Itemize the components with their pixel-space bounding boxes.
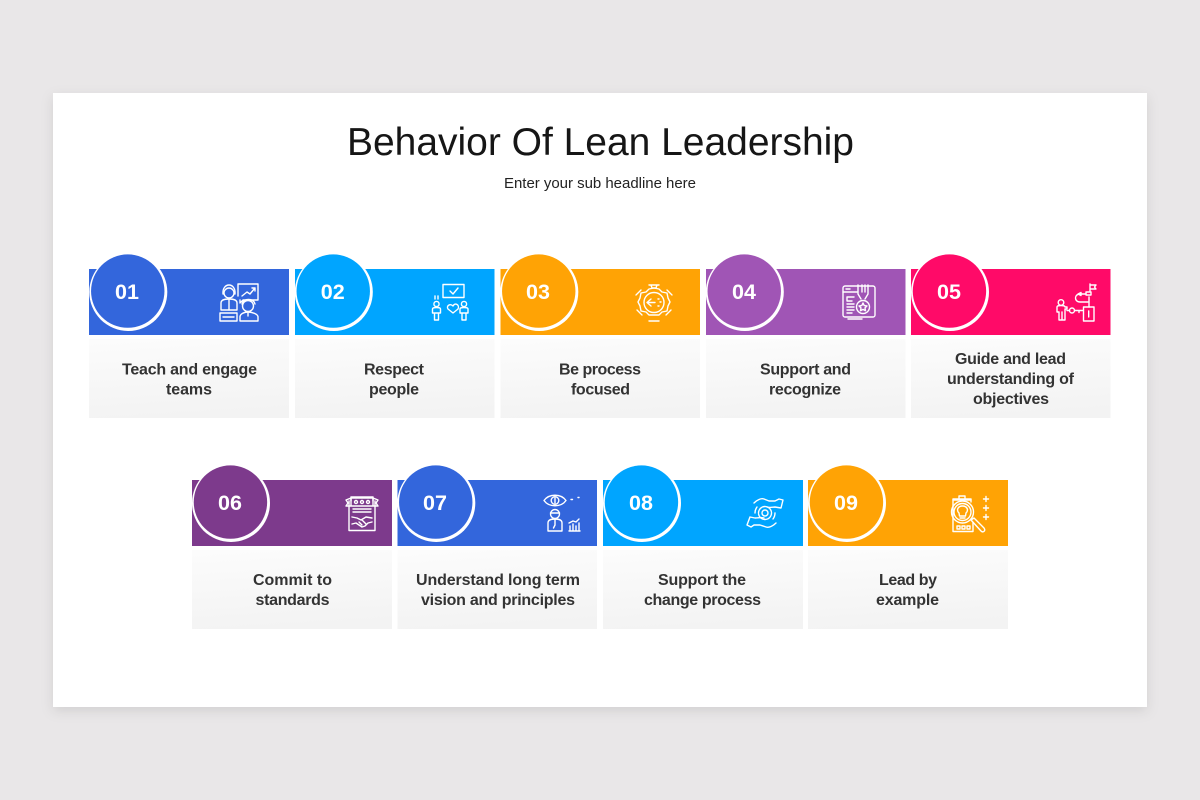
label line 2: change process [644, 592, 761, 609]
number circle [605, 465, 678, 539]
header bar [500, 269, 700, 335]
number circle [297, 254, 370, 328]
circle ring [911, 253, 989, 331]
card 08: support the change process [603, 464, 803, 629]
header bar [295, 269, 494, 335]
circle ring [295, 253, 373, 331]
icon: lightbulb under magnifier with pluses [952, 496, 988, 532]
number circle [194, 465, 267, 539]
number: 02 [321, 280, 345, 304]
label: Guide and lead [955, 351, 1066, 368]
label line 2: people [369, 382, 419, 398]
icon: teacher and student with chart [220, 284, 258, 321]
card 06: commit to standards [192, 464, 392, 629]
circle ring [808, 464, 886, 542]
header bar [808, 480, 1008, 546]
circle ring [397, 464, 475, 542]
number: 06 [218, 491, 242, 515]
circle ring [89, 253, 167, 331]
text panel [911, 339, 1110, 418]
text panel [500, 339, 700, 418]
label: Support and [760, 362, 851, 378]
label: Understand long term [416, 572, 580, 589]
label line 3: objectives [973, 391, 1049, 408]
number: 07 [423, 491, 447, 515]
subtitle: Enter your sub headline here [504, 175, 696, 192]
label: Commit to [253, 572, 332, 589]
number: 01 [115, 280, 139, 304]
icon: contract with handshake [346, 497, 378, 530]
label: Respect [364, 362, 425, 378]
label line 2: understanding of [947, 371, 1075, 388]
header bar [398, 480, 597, 546]
text panel [706, 339, 906, 418]
label line 2: vision and principles [421, 592, 575, 609]
icon: hands around gear [747, 499, 783, 527]
circle ring [603, 464, 681, 542]
label line 2: example [876, 592, 939, 609]
header bar [192, 480, 392, 546]
header bar [603, 480, 803, 546]
number circle [913, 254, 986, 328]
circle ring [192, 464, 270, 542]
label: Lead by [879, 572, 937, 589]
title: Behavior Of Lean Leadership [347, 121, 854, 164]
text panel [295, 339, 494, 418]
card 04: support and recognize [706, 253, 906, 418]
number: 05 [937, 280, 961, 304]
number circle [399, 465, 472, 539]
number circle [708, 254, 781, 328]
number: 08 [629, 491, 653, 515]
label: Be process [559, 362, 641, 378]
number circle [502, 254, 575, 328]
slide panel [53, 93, 1147, 707]
icon: eye, person and bar chart [544, 495, 580, 531]
circle ring [706, 253, 784, 331]
circle ring [500, 253, 578, 331]
text panel [89, 339, 289, 418]
header bar [89, 269, 289, 335]
card 03: be process focused [500, 253, 700, 418]
card 02: respect people [295, 253, 494, 418]
text panel [808, 550, 1008, 629]
card 07: understand long term vision and principles [397, 464, 597, 629]
number circle [91, 254, 164, 328]
label line 2: focused [571, 382, 630, 398]
text panel [192, 550, 392, 629]
icon: two people, heart and check board [432, 284, 468, 320]
card 09: lead by example [808, 464, 1008, 629]
label: Teach and engage [122, 362, 257, 378]
card 01: teach and engage teams [89, 253, 289, 418]
label line 2: recognize [769, 382, 841, 398]
text panel [603, 550, 803, 629]
header bar [911, 269, 1110, 335]
icon: gear with target [636, 285, 672, 321]
number: 04 [732, 280, 756, 304]
header bar [706, 269, 906, 335]
number: 09 [834, 491, 858, 515]
label line 2: standards [256, 592, 330, 609]
number circle [810, 465, 883, 539]
label line 2: teams [166, 382, 212, 398]
label: Support the [658, 572, 746, 589]
card 05: guide and lead understanding of objectives [911, 253, 1110, 418]
number: 03 [526, 280, 550, 304]
icon: person with key, lock and flag [1057, 284, 1096, 321]
icon: web page with medal [843, 285, 875, 319]
text panel [398, 550, 597, 629]
